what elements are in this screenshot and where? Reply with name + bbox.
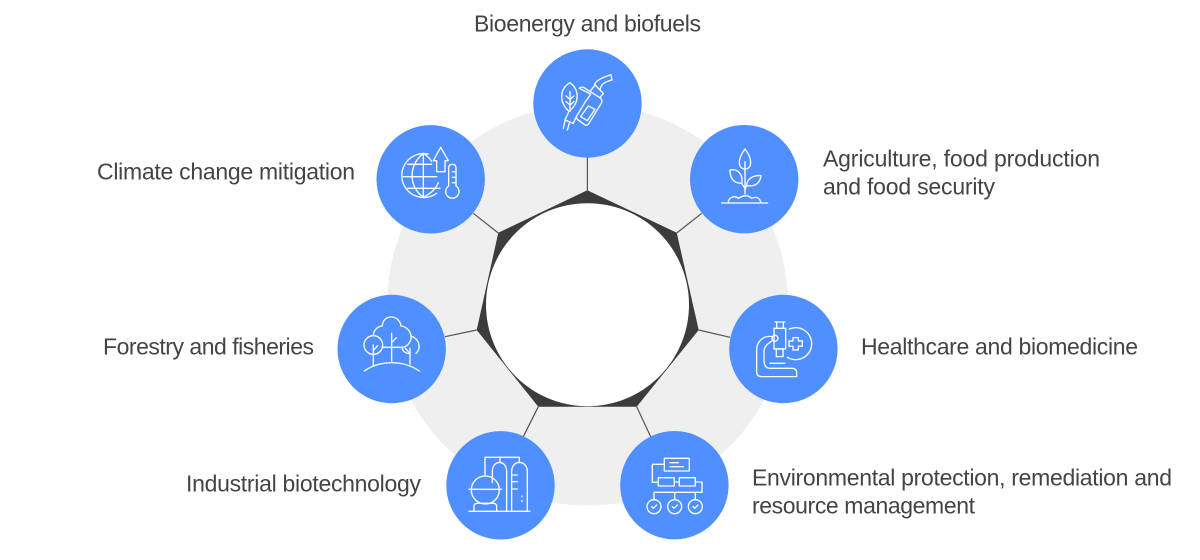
heading: bioenergy: Bioenergy and biofuels — [474, 10, 701, 36]
heading: industrial biotechnology: Industrial biotechnology — [186, 470, 422, 496]
node: industrial biotechnology — [186, 431, 555, 540]
blue circle: environmental protection — [620, 431, 729, 539]
node: climate change mitigation — [97, 125, 485, 234]
blue circle: bioenergy — [533, 49, 642, 158]
blue circle: forestry — [338, 295, 446, 403]
heading: climate change: Climate change mitigation — [97, 158, 355, 184]
icon: seedling — [722, 149, 768, 203]
icon: globe, arrow and thermometer — [402, 147, 459, 198]
blue circle: healthcare — [729, 295, 838, 403]
icon: leaf and fuel nozzle — [562, 75, 612, 130]
connector lines — [445, 157, 730, 437]
icon: process flow chart — [647, 458, 702, 514]
heading: forestry: Forestry and fisheries — [103, 334, 314, 360]
node: forestry and fisheries — [103, 295, 446, 403]
white centre circle — [486, 203, 689, 406]
heading: agriculture: Agriculture, food production — [823, 146, 1100, 172]
node: healthcare — [729, 295, 1138, 403]
heading: healthcare: Healthcare and biomedicine — [861, 334, 1138, 360]
icon: microscope and medical cross — [757, 322, 812, 377]
blue circle: agriculture — [690, 125, 798, 233]
dark heptagon hub — [477, 190, 699, 407]
blue circle: climate change — [376, 125, 485, 234]
icon: trees on a hill — [364, 317, 419, 371]
blue circle: industrial biotechnology — [446, 431, 555, 540]
node: environmental protection — [620, 431, 1172, 539]
node: bioenergy and biofuels — [474, 10, 701, 158]
icon: bioreactor plant — [469, 457, 530, 511]
grey background disc — [387, 104, 788, 506]
node: agriculture — [690, 125, 1100, 233]
heading line 2: agriculture: and food security — [823, 174, 996, 200]
heading line 2: environmental protection: resource management — [752, 492, 976, 518]
heading: environmental protection: Environmental protection, remediation and — [752, 464, 1172, 490]
